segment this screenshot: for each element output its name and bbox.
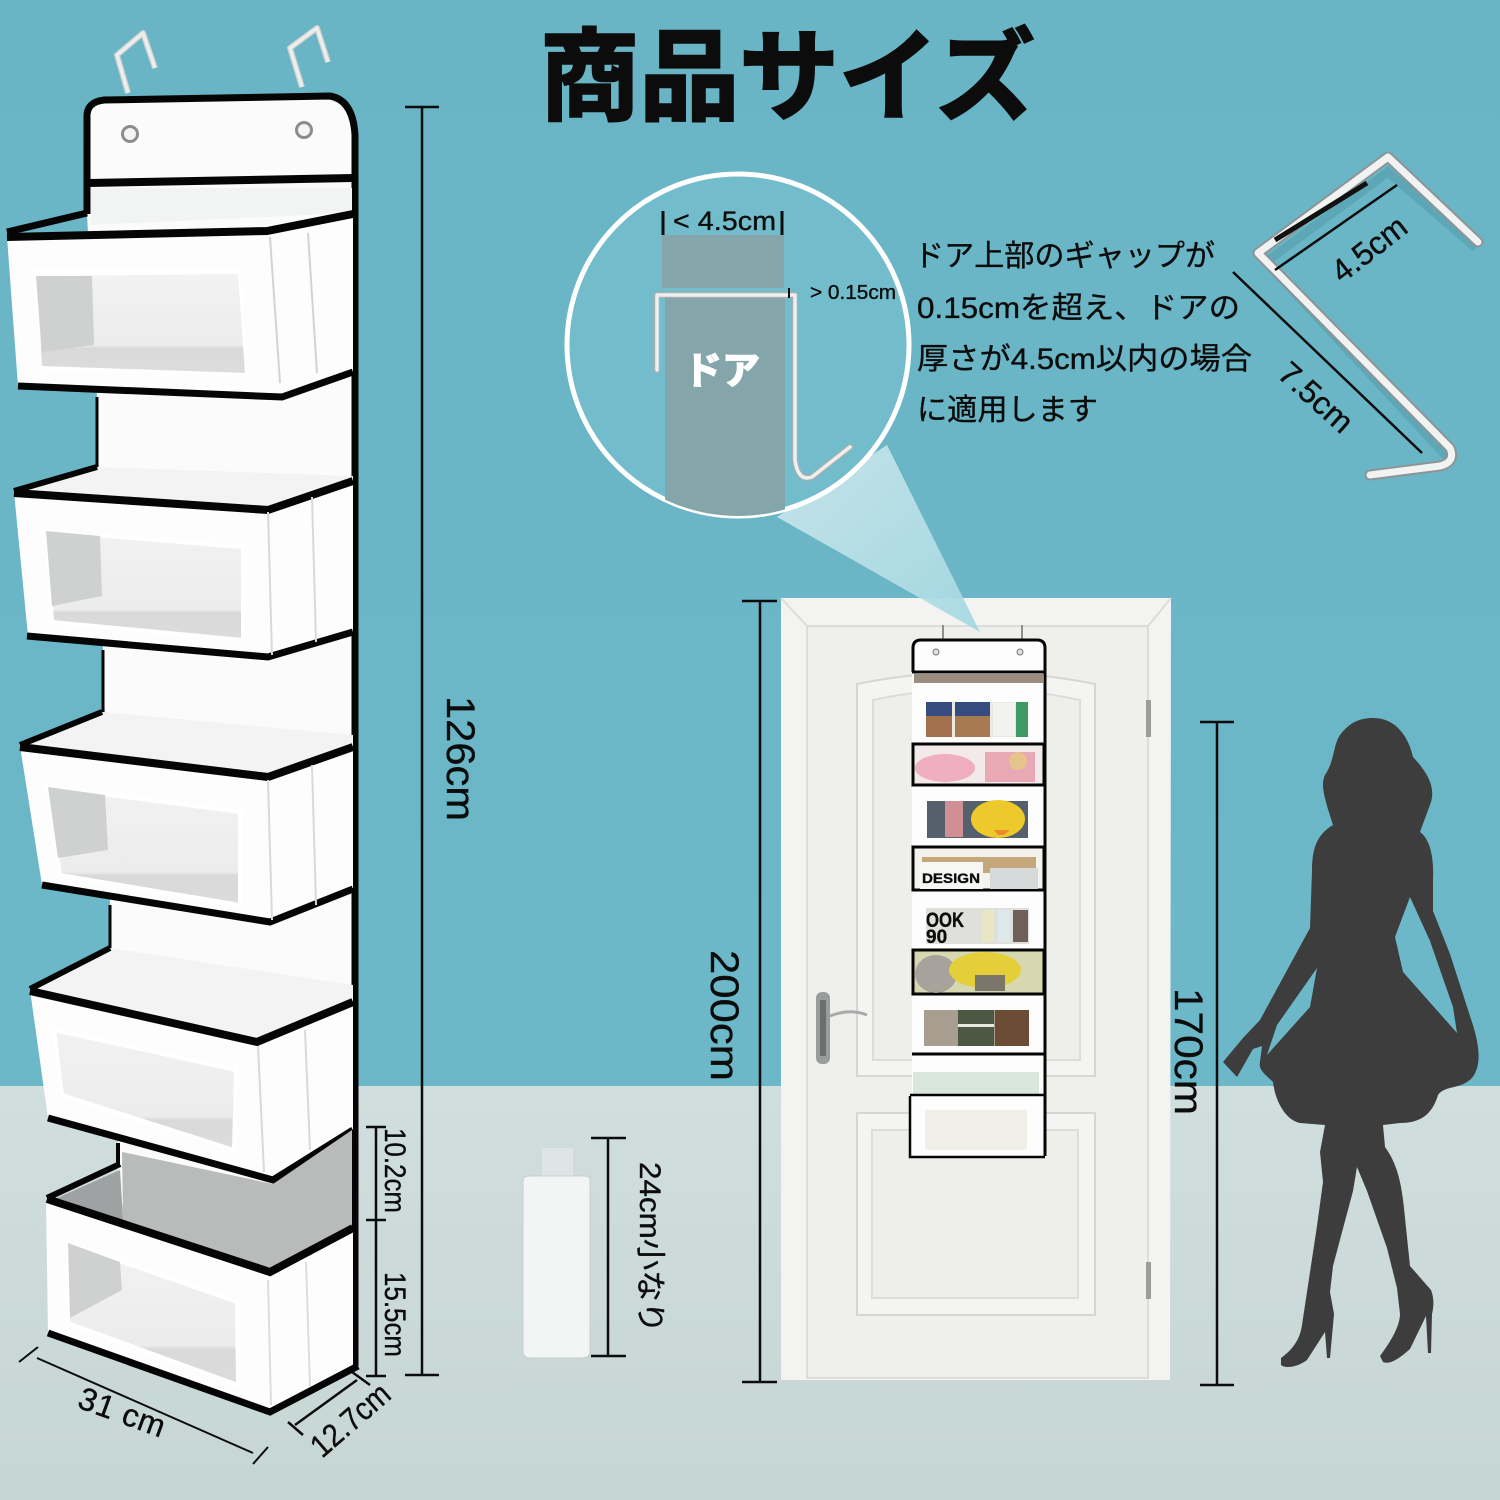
gap mark: [788, 288, 790, 298]
background floor: [0, 1086, 1500, 1500]
door upper panel: [857, 672, 1095, 1076]
dimension: 10.2cm and 15.5cm: 10.2cm: [378, 1128, 411, 1213]
pocket contents 5: [926, 908, 1029, 948]
background wall: [0, 0, 1500, 1086]
dimension: 170cm: [1166, 722, 1234, 1385]
label: door: ドア: [684, 351, 760, 393]
dimension: 126cm: 126cm: [438, 696, 482, 821]
hook detail with dimensions: [1233, 157, 1478, 475]
mesh strip: [91, 188, 352, 225]
hook detail with dimensions: 4.5cm: [1324, 208, 1414, 290]
back edge 2: [102, 650, 104, 712]
door frame: [781, 598, 1171, 1380]
door hooks: [943, 625, 1022, 640]
hook dark reflection: [1275, 183, 1367, 240]
note text: [914, 240, 1252, 427]
back edge 1: [96, 397, 98, 467]
pocket contents 2: [913, 744, 1044, 785]
dimension: bottle 24cm: 24cm小なり: [633, 1162, 666, 1333]
pocket contents 5: OOK: [926, 909, 964, 932]
frame bevels: [781, 598, 1171, 626]
pocket 1: [7, 213, 353, 397]
dimension: bottle 24cm: [591, 1138, 666, 1356]
dimension: 126cm: [405, 107, 482, 1375]
hook in circle: [657, 295, 850, 478]
door slab: [807, 626, 1148, 1378]
pocket 5: [46, 1143, 358, 1413]
hooks: [117, 28, 328, 93]
pocket contents 3: [927, 800, 1028, 838]
handle: [816, 992, 867, 1064]
dimension: 12.7cm: 12.7cm: [303, 1375, 398, 1464]
pocket 5 interior: [122, 1130, 352, 1273]
back edge 3: [108, 905, 112, 948]
pocket contents 1: [926, 702, 1028, 737]
circle: hook detail: [567, 174, 909, 520]
pocket contents 7: [924, 1010, 1029, 1046]
dimension: gap: > 0.15cm: [810, 282, 896, 304]
pocket 3: [20, 712, 353, 922]
dimension: 31 cm: 31 cm: [74, 1380, 170, 1444]
pocket contents 5: 90: [926, 927, 947, 948]
note text: に適用します: [917, 394, 1098, 427]
hook shadow: [1266, 172, 1476, 462]
bottom pocket: [910, 1095, 1045, 1157]
note text: 厚さが4.5cm以内の場合: [917, 343, 1252, 376]
title: 商品サイズ: [540, 22, 1035, 134]
door body: [665, 298, 785, 520]
pocket contents 6: [913, 950, 1044, 994]
dimension: 10.2cm and 15.5cm: 15.5cm: [378, 1272, 411, 1357]
pocket contents 8: [912, 1054, 1045, 1094]
hinges: [1146, 700, 1151, 1299]
pocket 4: [30, 948, 353, 1180]
grommets: [122, 122, 312, 142]
organizer: large product photo: [7, 28, 358, 1413]
pocket contents 4: DESIGN: [922, 870, 980, 886]
band under top flap: [89, 178, 353, 183]
silhouette: woman: [1223, 718, 1479, 1367]
back panel: [84, 94, 356, 1368]
hook detail with dimensions: 7.5cm: [1271, 354, 1361, 440]
door top block: [662, 235, 784, 288]
door illustration: [781, 598, 1171, 1380]
note text: 0.15cmを超え、ドアの: [917, 292, 1240, 325]
dimension: 200cm: [702, 601, 777, 1382]
dimension: 170cm: 170cm: [1166, 988, 1210, 1115]
hook metal: [1258, 157, 1478, 475]
pocket contents 4: [913, 847, 1044, 890]
pocket 2: [14, 467, 353, 657]
door lower panel: [857, 1113, 1095, 1315]
beam from door to circle: [777, 445, 980, 632]
dimension: 10.2cm and 15.5cm: [366, 1127, 411, 1376]
mini organizer on door: [910, 625, 1045, 1158]
dimension: less than 4.5cm: < 4.5cm: [673, 206, 776, 236]
bottle: [523, 1148, 590, 1358]
note text: ドア上部のギャップが: [914, 240, 1215, 273]
dimension: 200cm: 200cm: [702, 950, 746, 1081]
dimension: 31 cm: [19, 1347, 268, 1464]
